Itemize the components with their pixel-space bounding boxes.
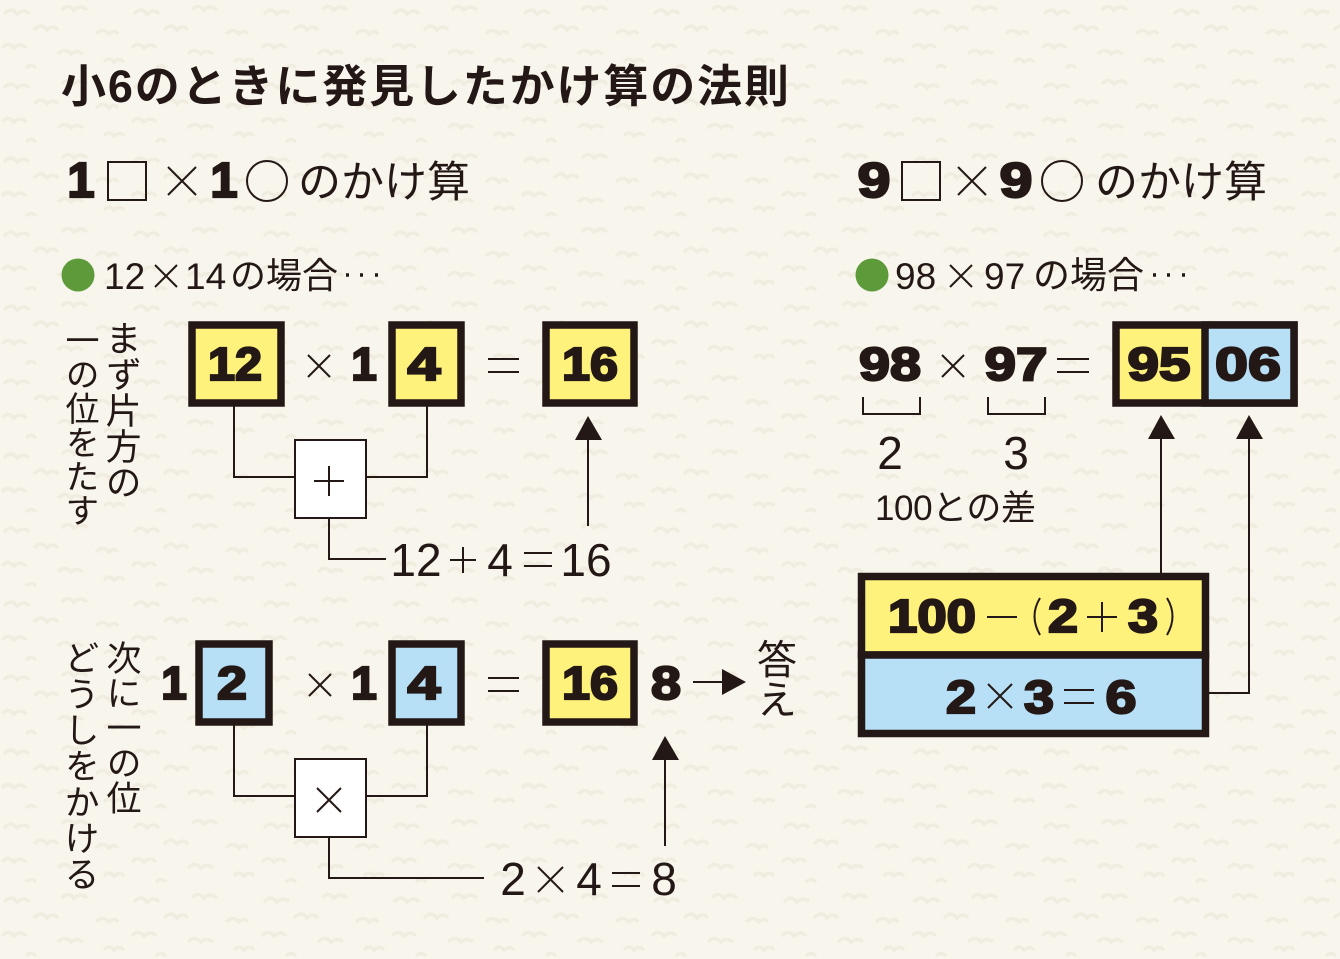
multiply sign (309, 674, 331, 696)
formula: 100-(2+3) (862, 576, 1206, 655)
digit 8: 8 (651, 657, 681, 709)
example label: 98×97 (856, 255, 1185, 297)
arrow: formula to 95 (1148, 415, 1175, 573)
calculation: 2×4=8: 2 (500, 853, 526, 905)
formula: 100-(2+3): 3 (1128, 590, 1158, 642)
box: 16: 16 (562, 338, 618, 390)
example label: 12×14: 12 (104, 256, 145, 297)
brackets: difference from 100 (863, 397, 1045, 528)
brackets: difference from 100: 100との差 (875, 489, 1036, 528)
equation: 12 × 14 = 16 (192, 325, 634, 403)
example label: 98×97: 97 (984, 256, 1025, 297)
heading: 9□×9○ のかけ算: のかけ算 (1095, 159, 1267, 207)
box: 4: 4 (408, 338, 441, 390)
arrow up to 8 (652, 736, 679, 846)
heading: 9□×9○ のかけ算 (858, 154, 1267, 208)
formula: 100-(2+3): 2 (1048, 590, 1078, 642)
box: 2: 2 (217, 657, 247, 709)
heading: 9□×9○ のかけ算: 9 (858, 154, 890, 208)
calculation: 2×4=8: 8 (651, 853, 677, 905)
box: 4: 4 (408, 657, 441, 709)
digit 1: 1 (161, 657, 187, 709)
formula: 2×3=6 (862, 655, 1206, 734)
heading: 1□×1○ のかけ算: のかけ算 (298, 159, 470, 207)
box: 12: 12 (208, 338, 262, 390)
vertical note: step 1 (60, 320, 142, 527)
digit 1: 1 (351, 338, 377, 390)
example label: 98×97: の場合 (1033, 255, 1144, 296)
formula: 2×3=6: 3 (1024, 671, 1054, 723)
heading: 1□×1○ のかけ算: 1 (210, 154, 238, 208)
equals (488, 359, 519, 372)
vertical note: step 2: どうしをかける (60, 640, 98, 892)
box: 12 (192, 325, 281, 403)
plus connector (234, 406, 427, 559)
brackets: difference from 100: 3 (1003, 427, 1029, 479)
equation: 98 × 97 =: 97 (984, 338, 1048, 390)
example label: 12×14 (62, 255, 378, 297)
vertical note: step 1: 一の位をたす (60, 323, 99, 527)
box: 16 (546, 644, 634, 722)
result box: 95 06 (1116, 325, 1294, 403)
multiply sign (308, 355, 330, 377)
example label: 98×97: 98 (895, 256, 936, 297)
vertical note: step 1: まず片方の (100, 320, 142, 500)
example label: 12×14: 14 (185, 256, 226, 297)
formula: 2×3=6: 6 (1106, 671, 1136, 723)
result box: 95 06: 06 (1215, 338, 1281, 390)
arrow up to 16 (575, 416, 602, 526)
heading: 1□×1○ のかけ算 (67, 154, 470, 208)
box: 2 (199, 644, 269, 722)
calculation: 2×4=8 (500, 853, 677, 905)
box: 4 (392, 644, 461, 722)
box: 16 (546, 325, 634, 403)
heading: 9□×9○ のかけ算: 9 (1000, 154, 1032, 208)
box: 16: 16 (562, 657, 618, 709)
vertical note: step 2 (60, 640, 141, 892)
formula: 100-(2+3): 100 (888, 590, 976, 642)
box: 4 (392, 325, 461, 403)
calculation: 12+4=16: 4 (487, 534, 513, 586)
result box: 95 06: 95 (1128, 338, 1190, 390)
heading: 1□×1○ のかけ算: 1 (67, 154, 95, 208)
formula box (862, 576, 1206, 734)
calculation: 12+4=16 (390, 534, 612, 586)
equation: 12 × 14 = 168 (161, 644, 681, 722)
arrow: formula to 06 (1209, 415, 1263, 693)
brackets: difference from 100: 2 (877, 427, 903, 479)
calculation: 2×4=8: 4 (576, 853, 602, 905)
example label: 12×14: の場合 (230, 255, 338, 296)
title: 小6のときに発見したかけ算の法則 (61, 61, 789, 112)
calculation: 12+4=16: 16 (560, 534, 612, 586)
formula: 2×3=6: 2 (946, 671, 976, 723)
multiply connector (234, 725, 484, 878)
arrow to answer (693, 669, 746, 695)
equation: 98 × 97 = (859, 338, 1089, 390)
vertical note: step 2: 次に一の位 (102, 640, 141, 815)
equals (488, 678, 519, 691)
digit 1: 1 (351, 657, 377, 709)
answer label: 答え (751, 639, 796, 719)
equation: 98 × 97 =: 98 (859, 338, 921, 390)
calculation: 12+4=16: 12 (390, 534, 442, 586)
